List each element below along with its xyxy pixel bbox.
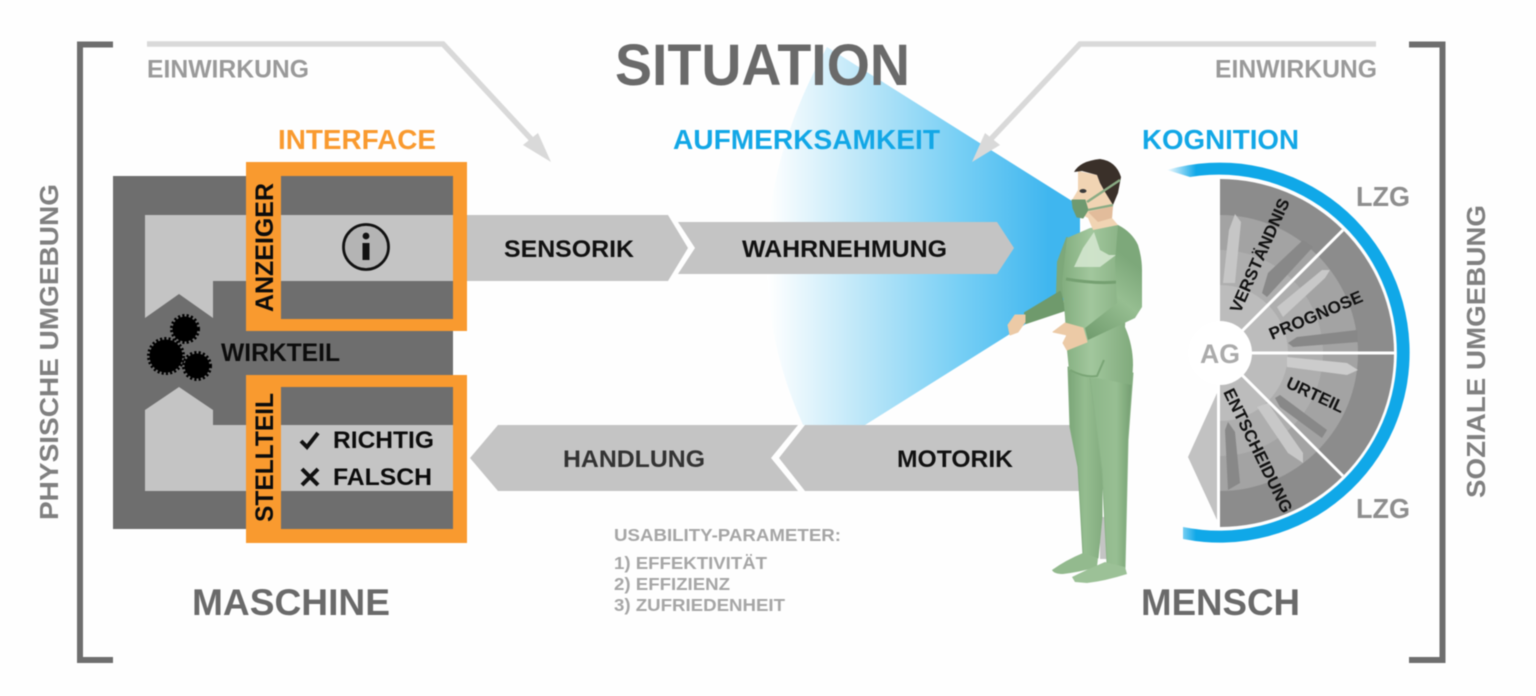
figure: person with mask [1008,159,1142,583]
attention cone [767,47,1080,425]
label: Urteil: URTEIL [1283,373,1348,417]
working memory hub [1188,321,1252,385]
neck and face [1072,171,1118,230]
label: Prognose: PROGNOSE [1266,287,1366,344]
torso [1062,225,1133,385]
arrow: Handlung [470,425,798,491]
far upper arm [1057,238,1075,300]
label: Wirkteil: WIRKTEIL [221,339,340,367]
panel: machine [113,176,453,529]
chest highlight [1074,232,1116,267]
text block: usability parameters: 3) ZUFRIEDENHEIT [614,595,785,615]
icon: cross [302,469,318,485]
label: Entscheidung: ENTSCHEIDUNG [1219,385,1296,516]
machine body [113,176,453,529]
panel: cognition wheel [1167,163,1410,543]
text block: usability parameters [614,525,841,615]
label: Maschine: MASCHINE [192,582,390,623]
text block: usability parameters: 1) EFFEKTIVITÄT [614,553,767,573]
orange frame Stellteil [246,375,467,543]
text block: usability parameters: 2) EFFIZIENZ [614,574,730,594]
upper signal channel [145,215,453,318]
icon: gears [150,316,210,378]
arrow: Einwirkung right [972,44,1376,162]
label: Wahrnehmung: WAHRNEHMUNG [742,236,947,263]
mask [1072,200,1088,218]
text block: usability parameters: USABILITY-PARAMETER: [614,525,841,545]
label: falsch: FALSCH [333,464,432,491]
neck shadow [1088,206,1113,222]
decorative arrow head [1188,393,1217,520]
far foot [1052,553,1098,574]
label: Verständnis: VERSTÄNDNIS [1226,196,1294,316]
panel: Stellteil [246,375,467,543]
near hand [1053,323,1087,350]
label: Anzeiger: ANZEIGER [251,183,279,312]
label: richtig: RICHTIG [333,427,434,454]
label: Stellteil: STELLTEIL [251,393,279,522]
far leg [1068,367,1102,558]
orange frame Anzeiger [246,162,467,331]
far forearm [1025,292,1065,323]
panel: Anzeiger [246,162,467,331]
wheel rings [1220,179,1394,527]
icon: check [301,433,318,447]
label: Einwirkung right: EINWIRKUNG [1215,56,1377,84]
arrow: Wahrnehmung [678,222,1014,274]
hair [1074,159,1121,205]
wheel separators [1218,230,1396,530]
arrow: Sensorik [467,215,688,281]
arrow: Einwirkung left [147,44,551,162]
eye [1080,189,1086,193]
heading: Kognition: KOGNITION [1142,124,1299,155]
mask straps [1087,180,1120,210]
gap shading between calves [1100,517,1107,559]
title: SITUATION [615,33,910,98]
label: LZG top: LZG [1356,181,1410,212]
label: Motorik: MOTORIK [897,446,1014,473]
label: Handlung: HANDLUNG [563,446,705,473]
label: Einwirkung left: EINWIRKUNG [147,56,309,84]
arrow: Motorik [779,425,1085,491]
icon: info [344,224,388,270]
label: AG: AG [1200,339,1240,369]
side label: soziale Umgebung: SOZIALE UMGEBUNG [1461,205,1491,498]
near leg [1090,373,1133,568]
heading: Aufmerksamkeit: AUFMERKSAMKEIT [673,124,940,155]
heading: Interface: INTERFACE [278,124,436,155]
right bracket [1409,44,1442,660]
crotch crease [1070,360,1104,376]
waist shading [1066,279,1118,283]
wheel spikes [1223,214,1358,490]
far hand [1008,315,1025,335]
label: Mensch: MENSCH [1141,582,1300,623]
near arm [1085,225,1142,340]
left bracket [80,44,113,660]
lower signal channel [145,387,453,491]
blue arc: long-term memory boundary [1167,163,1410,543]
label: LZG bottom: LZG [1356,493,1410,524]
near foot [1072,562,1127,583]
side label: physische Umgebung: PHYSISCHE UMGEBUNG [34,184,64,520]
label: Sensorik: SENSORIK [504,236,635,263]
